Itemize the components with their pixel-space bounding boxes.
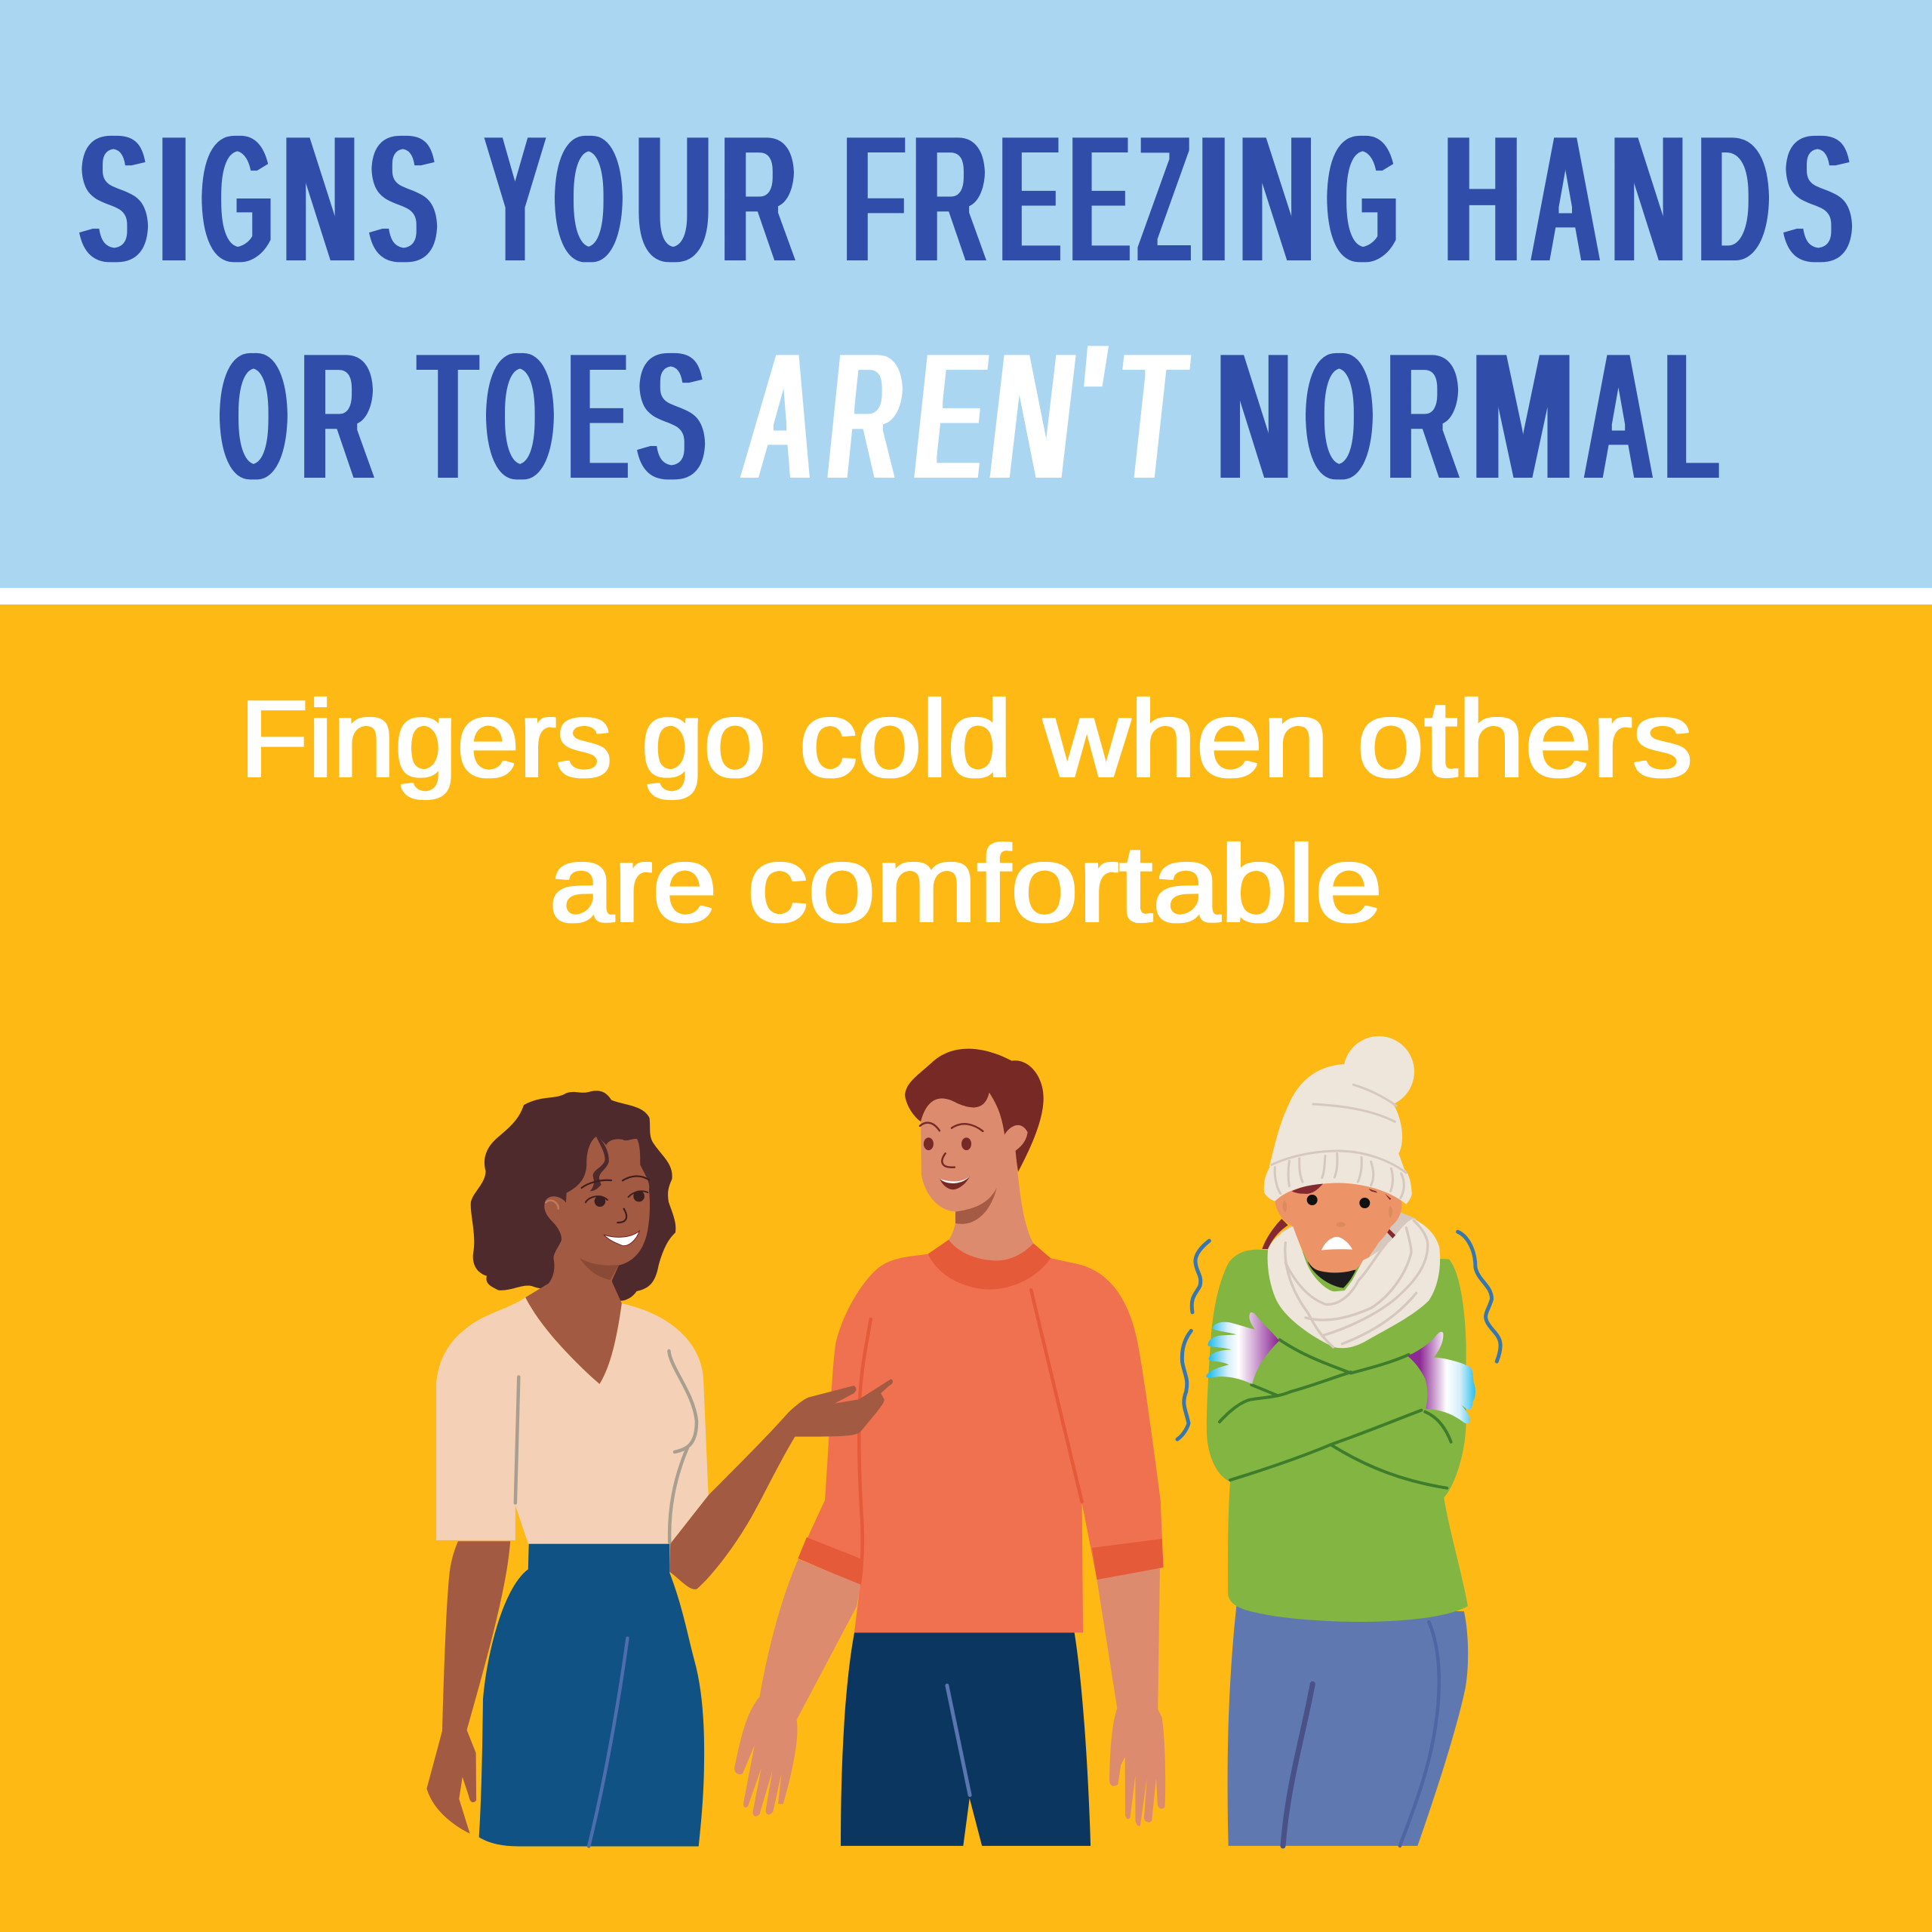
title: N bbox=[1217, 311, 1292, 521]
fringe hair bbox=[1292, 1183, 1391, 1200]
cold person head with hat and scarf bbox=[1262, 1036, 1440, 1348]
title: S bbox=[636, 311, 706, 521]
title: G bbox=[1326, 94, 1398, 303]
title: N bbox=[1611, 94, 1687, 303]
man right arm and hand bbox=[1097, 1567, 1165, 1826]
title: E bbox=[915, 311, 987, 521]
title: Y bbox=[484, 94, 546, 303]
eyes bbox=[1307, 1195, 1370, 1208]
title: A bbox=[741, 311, 814, 521]
scarf back bbox=[1281, 1213, 1417, 1259]
nose bbox=[1337, 1222, 1346, 1227]
title: N bbox=[1238, 94, 1315, 303]
man sweater seams bbox=[859, 1290, 1082, 1585]
woman head details bbox=[526, 1137, 650, 1306]
subtitle bbox=[240, 678, 1693, 945]
man face and neck bbox=[921, 1093, 1033, 1260]
ponytail hair bbox=[1262, 1219, 1288, 1249]
woman brows, lids and nose bbox=[582, 1176, 649, 1223]
title: N bbox=[990, 311, 1074, 521]
title: R bbox=[912, 94, 988, 303]
shiver lines bbox=[1177, 1232, 1500, 1439]
man chin shadow bbox=[955, 1188, 997, 1224]
title: R bbox=[1386, 311, 1461, 521]
subtitle: comfortable bbox=[747, 823, 1383, 945]
woman skirt bbox=[479, 1544, 704, 1846]
title: S bbox=[368, 94, 438, 303]
title: M bbox=[1471, 311, 1575, 521]
illustration: man in orange sweater bbox=[734, 1049, 1165, 1846]
man left arm and hand bbox=[734, 1559, 860, 1817]
white divider band bbox=[0, 588, 1932, 605]
title: U bbox=[635, 94, 712, 303]
woman pointing arm and hand bbox=[669, 1379, 893, 1589]
hat pompom bbox=[1343, 1036, 1414, 1107]
title: ' bbox=[1075, 302, 1107, 512]
subtitle: cold bbox=[799, 678, 1012, 800]
man smile bbox=[940, 1177, 970, 1189]
woman eyes bbox=[595, 1191, 645, 1207]
title: R bbox=[828, 311, 900, 521]
title: H bbox=[1444, 94, 1521, 303]
title: A bbox=[1531, 94, 1601, 303]
right hair strand bbox=[1386, 1229, 1396, 1239]
left gloved hand bbox=[1206, 1312, 1279, 1384]
chattering mouth bbox=[1321, 1237, 1352, 1251]
woman neck bbox=[525, 1281, 622, 1384]
subtitle: Fingers bbox=[240, 678, 612, 800]
title: E bbox=[1069, 94, 1131, 303]
cold person sweater bbox=[1207, 1250, 1468, 1622]
title: T bbox=[1118, 311, 1189, 521]
man brows and nose bbox=[920, 1123, 983, 1168]
man trousers bbox=[841, 1632, 1091, 1846]
woman ear inner bbox=[546, 1201, 558, 1209]
title: T bbox=[418, 311, 478, 521]
title: L bbox=[1664, 311, 1718, 521]
ears bbox=[1283, 1200, 1392, 1218]
man collar bbox=[928, 1240, 1051, 1290]
title: G bbox=[201, 94, 273, 303]
woman forehead lock bbox=[590, 1137, 609, 1191]
woman hair bbox=[471, 1091, 675, 1301]
title: I bbox=[158, 94, 190, 303]
title: A bbox=[1583, 311, 1654, 521]
panel: header bbox=[0, 0, 1932, 588]
title bbox=[78, 94, 1854, 521]
crossed arm lines bbox=[1220, 1340, 1451, 1488]
title: S bbox=[1783, 94, 1854, 303]
black undershirt neck bbox=[1308, 1262, 1356, 1288]
title: Z bbox=[1138, 94, 1190, 303]
man eyes bbox=[924, 1137, 971, 1150]
woman chin shadow bbox=[580, 1258, 619, 1280]
hat ribbed band bbox=[1264, 1152, 1412, 1204]
title: E bbox=[999, 94, 1061, 303]
woman face bbox=[526, 1137, 650, 1306]
woman blouse folds bbox=[515, 1351, 697, 1543]
cold person jeans bbox=[1228, 1606, 1468, 1846]
title: D bbox=[1697, 94, 1770, 303]
title: O bbox=[219, 311, 288, 521]
title: N bbox=[282, 94, 358, 303]
scarf folds bbox=[1285, 1220, 1428, 1347]
title: O bbox=[554, 94, 623, 303]
subtitle: go bbox=[641, 678, 766, 800]
title: R bbox=[721, 94, 797, 303]
man hair bbox=[905, 1049, 1044, 1172]
title: O bbox=[1305, 311, 1374, 521]
woman blouse bbox=[436, 1297, 709, 1544]
title: F bbox=[843, 94, 906, 303]
man cuffs bbox=[798, 1537, 1164, 1585]
man trouser crease bbox=[947, 1685, 970, 1795]
right gloved hand bbox=[1407, 1332, 1475, 1423]
title: O bbox=[485, 311, 555, 521]
man sweater bbox=[798, 1240, 1164, 1632]
woman left arm and hand bbox=[426, 1541, 510, 1834]
subtitle: when bbox=[1043, 678, 1329, 800]
title: I bbox=[1198, 94, 1229, 303]
woman smile bbox=[604, 1231, 639, 1246]
jeans creases bbox=[1283, 1622, 1439, 1846]
face bbox=[1275, 1183, 1401, 1272]
subtitle: are bbox=[549, 823, 717, 945]
knit hat bbox=[1269, 1064, 1406, 1174]
woman skirt crease bbox=[589, 1638, 627, 1846]
hat knit lines bbox=[1272, 1084, 1406, 1198]
scarf bbox=[1268, 1219, 1440, 1348]
title: R bbox=[300, 311, 376, 521]
illustration: shivering person in hat and scarf bbox=[1177, 1036, 1500, 1846]
subtitle: others bbox=[1357, 678, 1693, 800]
title: S bbox=[78, 94, 149, 303]
cold hands with gradient bbox=[1206, 1312, 1475, 1423]
title: E bbox=[568, 311, 629, 521]
illustration: woman in cream blouse bbox=[426, 1091, 893, 1846]
